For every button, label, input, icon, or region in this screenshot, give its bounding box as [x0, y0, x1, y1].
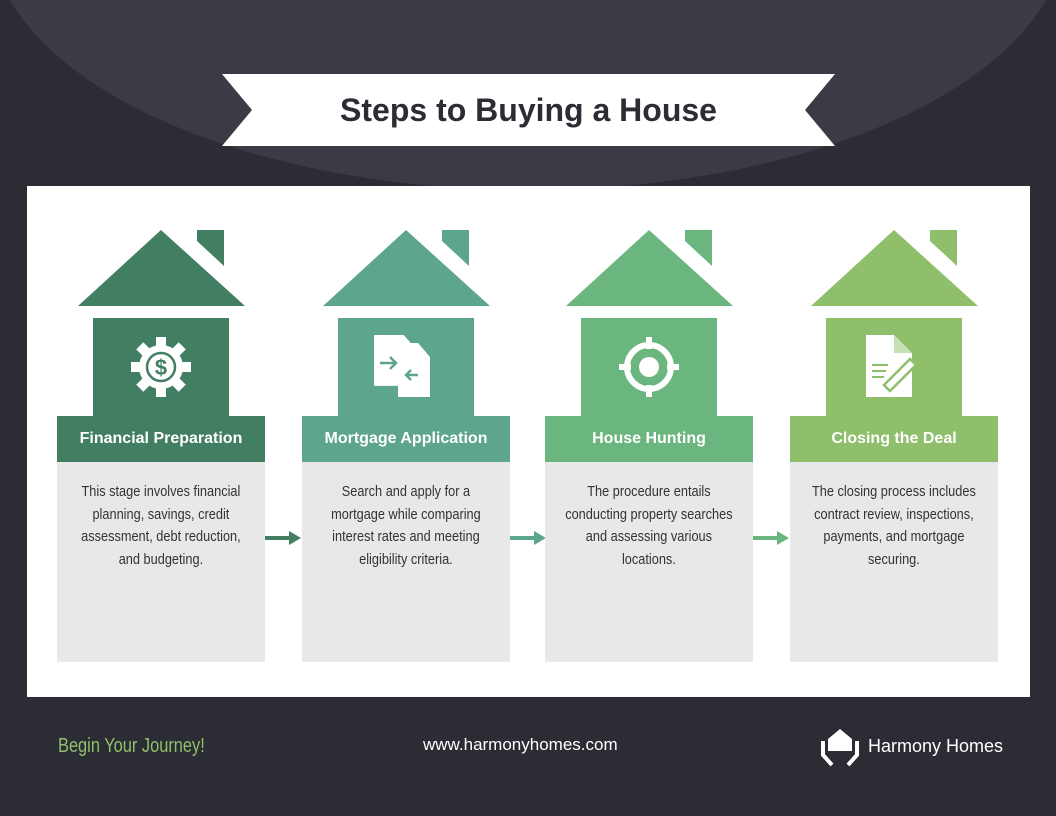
background ellipse [0, 0, 1056, 190]
icon: hands holding house [821, 729, 859, 766]
roof [323, 230, 490, 306]
step 4: Closing the Deal: The closing process includes contract review, inspections, payments, and mortgage securing. [812, 484, 976, 568]
step 3: House Hunting [545, 230, 753, 662]
step 2: Mortgage Application [302, 230, 510, 662]
footer tagline: Begin Your Journey! [58, 735, 205, 757]
icon: target [619, 337, 679, 397]
roof [566, 230, 733, 306]
step 3: House Hunting: The procedure entails conducting property searches and assessing various locations. [565, 484, 733, 568]
logo: Harmony Homes [868, 736, 1003, 756]
icon: dollar gear: $ [155, 355, 167, 380]
step 1: Financial Preparation [57, 230, 265, 662]
title banner [222, 74, 835, 146]
step 1: Financial Preparation: Financial Preparation [80, 430, 242, 447]
step 4: Closing the Deal [790, 230, 998, 662]
main white panel [27, 186, 1030, 697]
logo [821, 729, 1003, 766]
step 4: Closing the Deal: Closing the Deal [831, 430, 957, 447]
step 1: Financial Preparation: This stage involves financial planning, savings, credit assessment, debt reduction, and budgeting. [81, 484, 241, 568]
arrow 3 [753, 531, 789, 545]
step 3: House Hunting: House Hunting [592, 430, 706, 447]
icon: dollar gear [131, 337, 191, 397]
roof [78, 230, 245, 306]
title banner: Steps to Buying a House [340, 92, 717, 128]
step 2: Mortgage Application: Mortgage Application [325, 430, 487, 447]
roof [811, 230, 978, 306]
arrow 1 [265, 531, 301, 545]
icon: signing document [866, 335, 914, 397]
arrow 2 [510, 531, 545, 545]
footer url: www.harmonyhomes.com [423, 735, 618, 754]
step 2: Mortgage Application: Search and apply for a mortgage while comparing interest rates and meeting eligibility criteria. [331, 484, 481, 568]
icon: documents [374, 335, 430, 397]
